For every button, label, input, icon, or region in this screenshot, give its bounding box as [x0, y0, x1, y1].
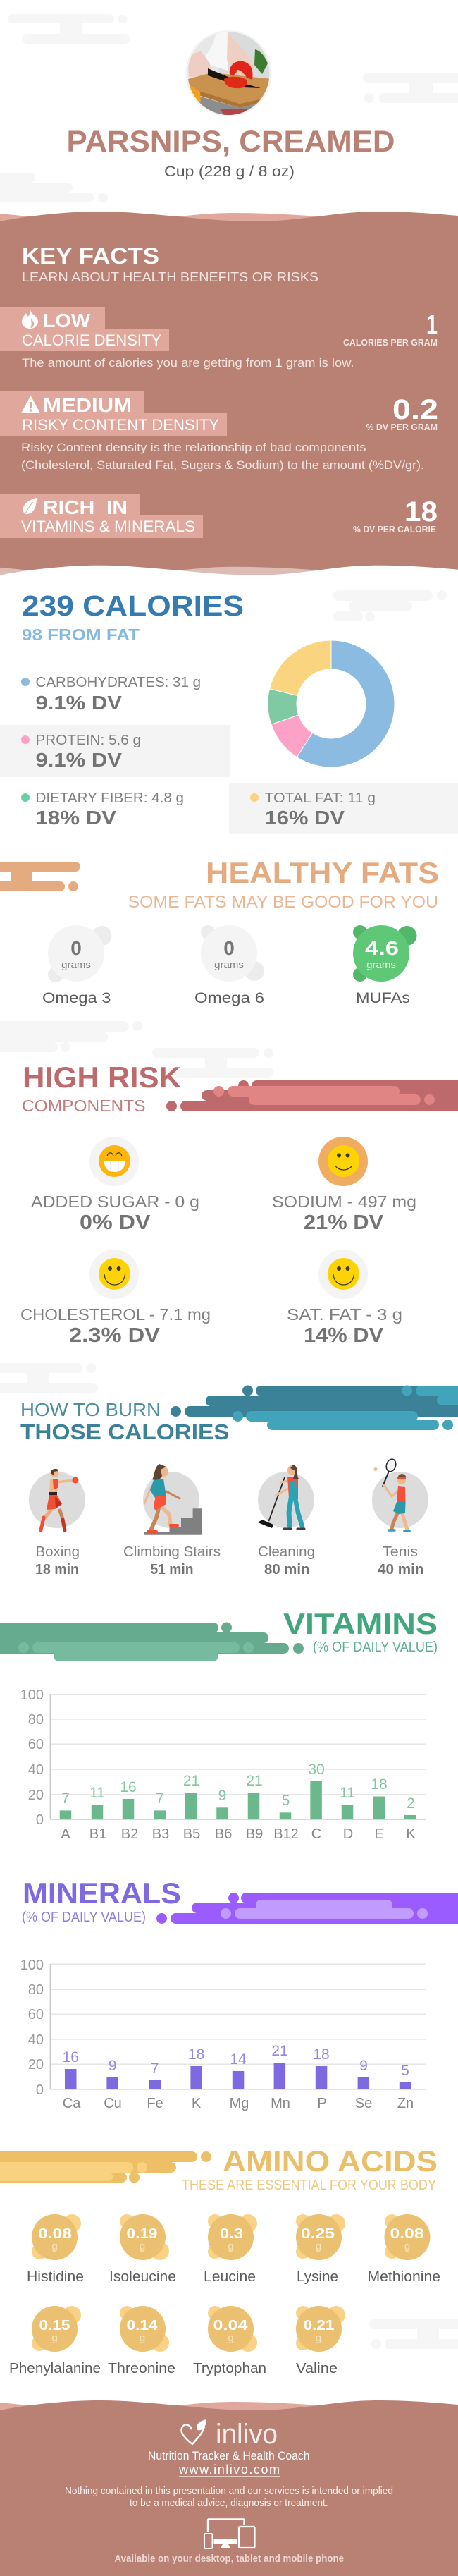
subheading: key facts: LEARN ABOUT HEALTH BENEFITS OR RISKS [22, 270, 318, 284]
activity: climbing stairs: Climbing Stairs [123, 1544, 221, 1560]
bar chart: vitamins: B2 [121, 1826, 138, 1842]
risky content density block: 0.2 [392, 394, 438, 425]
heading: key facts: KEY FACTS [22, 243, 159, 269]
rich in block: % DV PER CALORIE [353, 525, 436, 535]
activity: cleaning [258, 1465, 315, 1577]
risky content density block: MEDIUM [43, 394, 132, 416]
bar chart: vitamins: 100 [20, 1687, 44, 1703]
rich in block: 18 [404, 496, 438, 527]
risky content density block: % DV PER GRAM [366, 422, 438, 432]
amino acid: phenylalanine: Phenylalanine [9, 2361, 101, 2376]
bar chart: vitamins: B5 [183, 1826, 200, 1842]
bar chart: vitamins: B6 [215, 1826, 232, 1842]
amino acid: threonine: g [140, 2332, 145, 2344]
fat badge: MUFAs: 4.6 [365, 937, 399, 959]
bar chart: minerals: 14 [230, 2051, 247, 2068]
risk item: sodium [272, 1137, 416, 1234]
bar chart: vitamins: 21 [246, 1773, 263, 1789]
bar chart: minerals: 40 [28, 2032, 44, 2048]
amino acid: lysine: 0.25 [301, 2226, 335, 2242]
legend: carbohydrates: CARBOHYDRATES: 31 g [35, 675, 201, 690]
disclaimer: Nothing contained in this presentation and our services is intended or implied [65, 2485, 393, 2497]
bar chart: minerals: Zn [397, 2096, 414, 2111]
disclaimer: to be a medical advice, diagnosis or treatment. [130, 2497, 328, 2509]
amino acid: leucine: 0.3 [220, 2226, 243, 2242]
subheading: vitamins: (% OF DAILY VALUE) [313, 1640, 438, 1655]
amino acid: threonine: Threonine [108, 2361, 175, 2376]
calorie density block [0, 307, 438, 370]
bar chart: vitamins: C [311, 1826, 321, 1842]
fat badge: omega 6: grams [214, 959, 244, 971]
bar chart: vitamins: 30 [308, 1762, 325, 1778]
bar chart: vitamins: 11 [89, 1785, 105, 1801]
icon: warning triangle [21, 396, 40, 413]
bar chart: vitamins: B1 [89, 1826, 106, 1842]
bar chart: vitamins: 40 [28, 1762, 44, 1778]
bar chart: vitamins: 7 [61, 1790, 70, 1807]
risk item: added sugar [31, 1137, 199, 1234]
bar chart: vitamins: 5 [282, 1793, 290, 1809]
serving size: Cup (228 g / 8 oz) [164, 164, 295, 180]
amino acid: histidine: Histidine [27, 2269, 84, 2285]
amino acid: isoleucine [109, 2214, 176, 2285]
heading: healthy fats: HEALTHY FATS [206, 856, 439, 889]
risk item: added sugar: 0% DV [80, 1211, 151, 1234]
calorie density block: CALORIE DENSITY [22, 331, 161, 349]
bar chart: minerals: 9 [359, 2058, 368, 2074]
risk item: cholesterol [20, 1250, 211, 1347]
activity: cleaning: Cleaning [258, 1544, 315, 1560]
bar chart: vitamins: E [374, 1826, 384, 1842]
legend: dietary fiber: 18% DV [35, 807, 116, 829]
panel: footer background [0, 2400, 458, 2576]
amino acid: isoleucine: Isoleucine [109, 2269, 176, 2285]
amino acid: methionine [368, 2214, 440, 2285]
decorative shape: healthy fats [0, 862, 80, 891]
risk item: cholesterol: 2.3% DV [69, 1324, 161, 1347]
bar chart: minerals: Ca [63, 2096, 81, 2111]
risk item: added sugar: ADDED SUGAR - 0 g [31, 1192, 199, 1211]
amino acid: valine: g [316, 2332, 321, 2344]
legend: carbohydrates [21, 675, 201, 714]
risk item: cholesterol: CHOLESTEROL - 7.1 mg [20, 1305, 211, 1324]
bar chart: minerals: K [192, 2096, 202, 2111]
amino acid: tryptophan [193, 2306, 266, 2376]
bar chart: vitamins: 21 [183, 1773, 199, 1789]
heading: high risk: HIGH RISK [23, 1061, 181, 1094]
risk item: saturated fat [287, 1250, 402, 1347]
amino acid: phenylalanine: g [51, 2332, 58, 2344]
bar chart: minerals: 60 [28, 2007, 44, 2022]
risky content density block: Risky Content density is the relationship of bad components [21, 441, 366, 454]
calorie density block: The amount of calories you are getting from 1 gram is low. [22, 356, 354, 370]
bar chart: vitamins [20, 1687, 426, 1842]
subheading: amino acids: THESE ARE ESSENTIAL FOR YOUR BODY [182, 2178, 436, 2193]
amino acid: threonine [108, 2306, 175, 2376]
subheading: minerals: (% OF DAILY VALUE) [22, 1910, 146, 1925]
fat badge: MUFAs: MUFAs [356, 990, 410, 1006]
bar chart: vitamins: 9 [218, 1788, 226, 1804]
fat badge: omega 3: 0 [70, 937, 82, 959]
bar chart: minerals: 5 [401, 2063, 409, 2079]
amino acid: isoleucine: g [140, 2240, 145, 2252]
panel: key facts background [0, 212, 458, 590]
risky content density block: RISKY CONTENT DENSITY [22, 416, 219, 434]
bar chart: minerals [20, 1958, 426, 2111]
decorative shape: amino acids [0, 2151, 211, 2183]
logo: inlivo: inlivo [216, 2419, 278, 2450]
bar chart: vitamins: 0 [36, 1812, 44, 1828]
activity: climbing stairs [123, 1464, 221, 1577]
amino acid: methionine: g [404, 2240, 410, 2252]
bar chart: minerals: 18 [188, 2046, 204, 2063]
bar chart: minerals: 16 [63, 2049, 79, 2065]
donut chart [268, 640, 395, 767]
heading: how to burn: HOW TO BURN [20, 1399, 161, 1420]
bar chart: vitamins: 7 [156, 1790, 164, 1807]
fat badge: omega 6 [194, 925, 264, 1006]
amino acid: tryptophan: 0.04 [213, 2318, 249, 2333]
activity: boxing [29, 1469, 85, 1577]
legend: total fat [229, 783, 458, 834]
decorative shape: high risk [166, 1080, 458, 1111]
bar chart: vitamins: A [61, 1826, 70, 1842]
fat badge: MUFAs [353, 925, 417, 1006]
risk item: saturated fat: 14% DV [304, 1324, 384, 1347]
bar chart: minerals: 9 [109, 2058, 116, 2074]
amino acid: valine: 0.21 [303, 2318, 334, 2333]
bar chart: minerals: 18 [313, 2046, 330, 2063]
legend: protein [0, 725, 230, 777]
risky content density block [0, 391, 438, 472]
bar chart: vitamins: B12 [273, 1826, 299, 1842]
heading: calories: 239 CALORIES [22, 590, 244, 622]
bar chart: vitamins: 80 [28, 1712, 44, 1728]
website link: www.inlivo.com [178, 2462, 280, 2477]
amino acid: leucine [204, 2214, 257, 2285]
amino acid: histidine: 0.08 [38, 2226, 72, 2242]
fat badge: omega 6: 0 [223, 937, 235, 959]
bar chart: minerals: Mn [271, 2096, 290, 2111]
amino acid: valine [296, 2306, 345, 2376]
tagline: Nutrition Tracker & Health Coach [148, 2449, 310, 2462]
rich in block: VITAMINS & MINERALS [21, 518, 195, 535]
amino acid: isoleucine: 0.19 [127, 2226, 158, 2242]
activity: cleaning: 80 min [264, 1562, 310, 1577]
rich in block [0, 494, 438, 538]
calorie density block: LOW [43, 310, 91, 331]
amino acid: valine: Valine [296, 2361, 338, 2376]
fat badge: omega 3: Omega 3 [42, 990, 111, 1006]
bar chart: vitamins: 11 [340, 1785, 355, 1801]
risk item: saturated fat: SAT. FAT - 3 g [287, 1305, 402, 1324]
bar chart: vitamins: 16 [120, 1779, 137, 1795]
activity: boxing: 18 min [35, 1562, 79, 1577]
bar chart: minerals: Fe [147, 2096, 163, 2111]
fat badge: omega 3 [42, 925, 111, 1006]
bar chart: vitamins: B9 [246, 1826, 263, 1842]
title: PARSNIPS, CREAMED [66, 125, 395, 159]
amino acid: phenylalanine [9, 2306, 101, 2376]
bar chart: vitamins: B3 [152, 1826, 169, 1842]
risk item: sodium: SODIUM - 497 mg [272, 1192, 416, 1211]
amino acid: lysine: g [316, 2240, 321, 2252]
bar chart: vitamins: D [343, 1826, 353, 1842]
logo: inlivo [182, 2419, 278, 2450]
heading: those calories: THOSE CALORIES [20, 1420, 230, 1444]
amino acid: leucine: Leucine [204, 2269, 256, 2285]
amino acid: leucine: g [228, 2240, 234, 2252]
bar chart: minerals: Mg [230, 2096, 249, 2111]
bar chart: minerals: Cu [104, 2096, 122, 2111]
rich in block: RICH IN [43, 496, 128, 518]
legend: total fat: TOTAL FAT: 11 g [265, 790, 376, 806]
icon: flame [22, 310, 38, 329]
amino acid: histidine: g [51, 2240, 58, 2252]
fat badge: MUFAs: grams [366, 959, 396, 971]
amino acid: tryptophan: g [228, 2332, 234, 2344]
amino acid: phenylalanine: 0.15 [39, 2318, 70, 2333]
subheading: healthy fats: SOME FATS MAY BE GOOD FOR YOU [128, 893, 438, 912]
legend: total fat: 16% DV [265, 807, 345, 829]
bar chart: minerals: 21 [271, 2043, 288, 2059]
amino acid: methionine: Methionine [368, 2269, 440, 2285]
legend: dietary fiber [21, 790, 184, 829]
food photo [186, 30, 272, 116]
activity: tennis: 40 min [378, 1562, 424, 1577]
legend: protein: 9.1% DV [35, 749, 122, 771]
decorative shape: minerals [156, 1893, 458, 1924]
amino acid: lysine [296, 2214, 345, 2285]
amino acid: threonine: 0.14 [127, 2318, 158, 2333]
bar chart: minerals: 80 [28, 1982, 44, 1998]
calorie density block: CALORIES PER GRAM [343, 338, 438, 348]
bar chart: vitamins: 20 [28, 1788, 44, 1803]
activity: tennis [372, 1458, 428, 1577]
bar chart: minerals: 100 [20, 1958, 44, 1973]
availability note: Available on your desktop, tablet and mobile phone [114, 2553, 344, 2565]
decorative shape: vitamins [0, 1622, 304, 1661]
bar chart: vitamins: 60 [28, 1737, 44, 1752]
bar chart: vitamins: K [406, 1826, 416, 1842]
activity: climbing stairs: 51 min [151, 1562, 193, 1577]
amino acid: lysine: Lysine [297, 2269, 338, 2285]
decorative shape: burn calories [171, 1385, 458, 1430]
legend: carbohydrates: 9.1% DV [35, 692, 122, 714]
calorie density block: 1 [426, 310, 438, 341]
risky content density block: (Cholesterol, Saturated Fat, Sugars & Sodium) to the amount (%DV/gr). [21, 458, 424, 472]
amino acid: methionine: 0.08 [390, 2226, 424, 2242]
disclaimer [65, 2485, 393, 2509]
activity: boxing: Boxing [35, 1544, 80, 1560]
fat badge: omega 6: Omega 6 [194, 990, 264, 1006]
icon: leaf [23, 498, 37, 514]
heading: amino acids: AMINO ACIDS [223, 2144, 438, 2178]
risk item: sodium: 21% DV [304, 1211, 384, 1234]
bar chart: minerals: Se [355, 2096, 372, 2111]
amino acid: tryptophan: Tryptophan [193, 2361, 266, 2376]
icon: devices [204, 2519, 255, 2548]
bar chart: minerals: 0 [36, 2082, 44, 2098]
bar chart: minerals: P [317, 2096, 327, 2111]
bar chart: vitamins: 2 [407, 1795, 415, 1812]
bar chart: minerals: 7 [151, 2061, 159, 2077]
legend: protein: PROTEIN: 5.6 g [35, 733, 141, 748]
fat badge: omega 3: grams [61, 959, 91, 971]
amino acid: histidine [27, 2214, 84, 2285]
bar chart: minerals: 20 [28, 2057, 44, 2073]
heading: minerals: MINERALS [23, 1876, 181, 1910]
subheading: from fat: 98 FROM FAT [22, 625, 140, 644]
heading: vitamins: VITAMINS [283, 1607, 438, 1640]
subheading: components: COMPONENTS [22, 1097, 145, 1115]
bar chart: vitamins: 18 [371, 1776, 388, 1793]
activity: tennis: Tenis [383, 1544, 418, 1560]
legend: dietary fiber: DIETARY FIBER: 4.8 g [35, 790, 184, 806]
